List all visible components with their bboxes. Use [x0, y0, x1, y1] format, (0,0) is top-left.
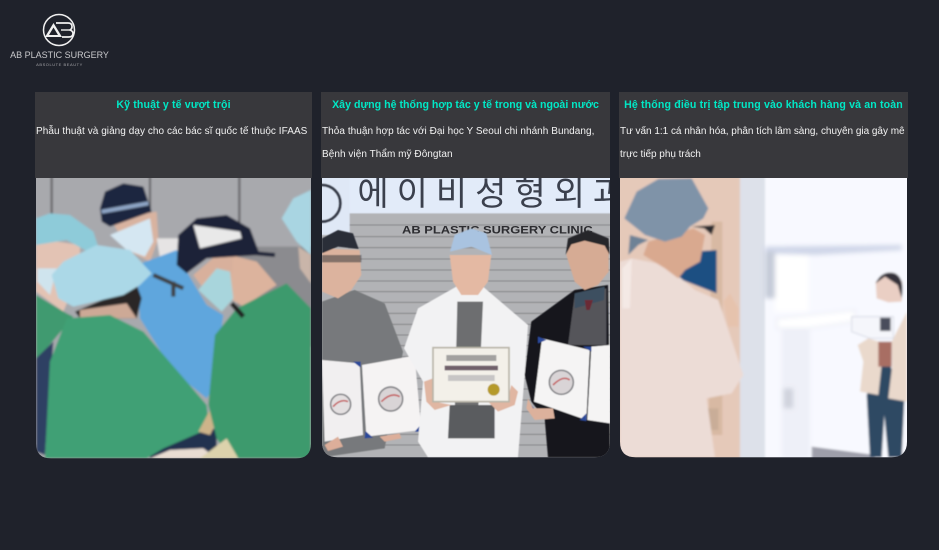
heading: Kỹ thuật y tế vượt trội — [116, 99, 231, 111]
logo tagline: ABSOLUTE BEAUTY — [36, 62, 83, 66]
logo mark — [42, 14, 76, 46]
photo: agreement signing — [322, 178, 610, 458]
panel header background — [35, 92, 312, 178]
description — [322, 126, 594, 160]
panel: patient-centred system — [619, 92, 908, 458]
description: Bệnh viện Thẩm mỹ Đôngtan — [322, 148, 453, 160]
description: Phẫu thuật và giảng dạy cho các bác sĩ quốc tế thuộc IFAAS — [36, 126, 307, 136]
photo: surgeons operating — [36, 178, 311, 458]
heading: Hệ thống điều trị tập trung vào khách hàng và an toàn — [624, 99, 903, 111]
panel header background — [619, 92, 908, 178]
description — [620, 126, 905, 160]
logo — [10, 14, 109, 66]
panel: medical technique — [35, 92, 312, 458]
panel header background — [321, 92, 610, 178]
photo: consultation in imaging room — [620, 178, 907, 458]
clinic name: AB PLASTIC SURGERY CLINIC — [402, 225, 593, 237]
heading: Xây dựng hệ thống hợp tác y tế trong và ngoài nước — [332, 99, 599, 111]
description: Thỏa thuận hợp tác với Đại học Y Seoul chi nhánh Bundang, — [322, 126, 594, 136]
logo name: AB PLASTIC SURGERY — [10, 50, 109, 60]
panel: medical cooperation — [321, 92, 610, 458]
description: Tư vấn 1:1 cá nhân hóa, phân tích lâm sàng, chuyên gia gây mê — [620, 126, 905, 136]
description: trực tiếp phụ trách — [620, 148, 701, 160]
